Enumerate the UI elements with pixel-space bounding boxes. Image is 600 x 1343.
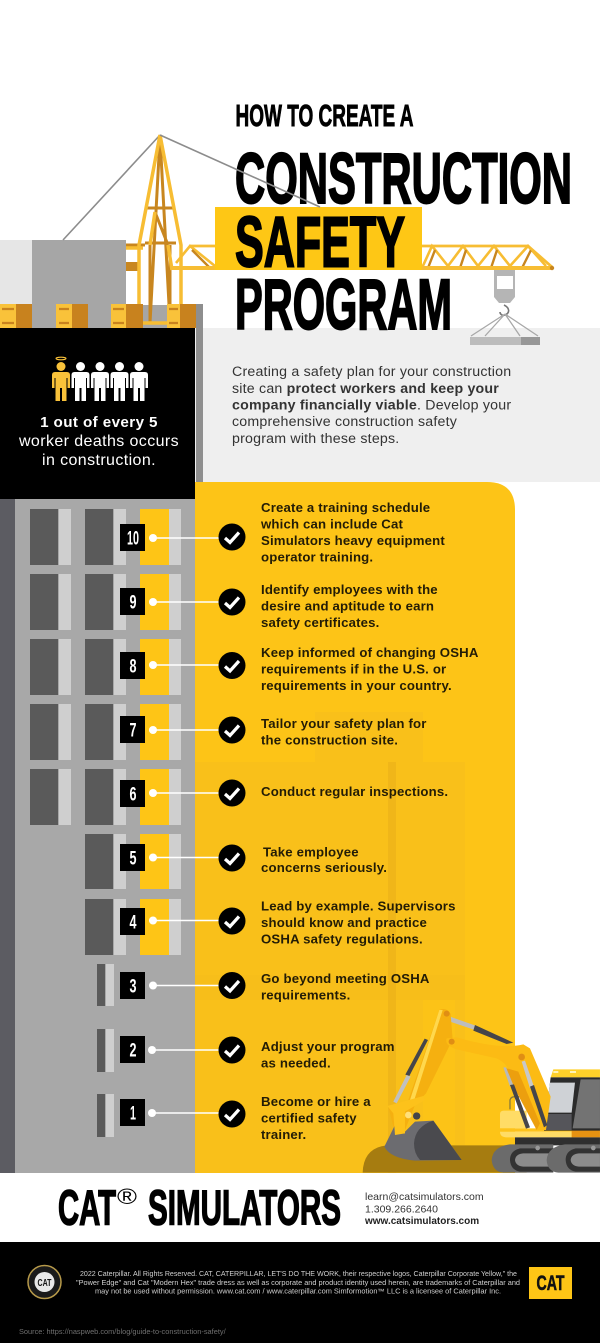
step 7 <box>120 716 427 748</box>
icon: check <box>218 972 246 999</box>
step 8 text <box>261 645 479 693</box>
intro text <box>232 364 511 447</box>
step 7 text <box>261 716 427 748</box>
icon: check <box>218 1036 246 1064</box>
step 3 <box>120 971 430 1002</box>
brand logo text: CAT <box>58 1182 116 1236</box>
legal text: may not be used without permission. www.cat.com / www.caterpillar.com Simformotion™ LLC is a licensee of Caterpillar Inc. <box>95 1288 501 1296</box>
number badge 8: 8 <box>130 656 137 678</box>
step 3 text: Go beyond meeting OSHA <box>261 971 430 986</box>
number badge 1: 1 <box>130 1102 136 1124</box>
contact details: 1.309.266.2640 <box>365 1204 438 1216</box>
step 8 <box>120 645 479 693</box>
heading line: safety: SAFETY <box>235 204 405 282</box>
step 8 text: Keep informed of changing OSHA <box>261 645 479 660</box>
panel: worker deaths statistic <box>0 328 195 499</box>
intro text: site can protect workers and keep your <box>232 381 499 397</box>
number badge 4 <box>120 908 145 935</box>
step 10 text: Create a training schedule <box>261 500 430 515</box>
highlight behind word safety <box>215 207 422 270</box>
cat logo box: CAT <box>536 1272 565 1295</box>
excavator tracks <box>492 1144 553 1173</box>
step 9 text: safety certificates. <box>261 615 380 630</box>
step 2 text: as needed. <box>261 1056 331 1070</box>
icon: five workers, one with halo <box>52 357 148 401</box>
step 1 text <box>261 1094 371 1142</box>
icon: check <box>218 716 246 744</box>
number badge 2 <box>120 1036 145 1063</box>
step 10 text <box>260 500 445 564</box>
step 9 text: desire and aptitude to earn <box>261 598 434 614</box>
number badge 6: 6 <box>130 784 137 806</box>
number badge 4: 4 <box>130 912 137 934</box>
brand logo text: ® <box>117 1184 137 1209</box>
heading line: program: PROGRAM <box>235 266 452 345</box>
background band: light gray intro panel <box>195 328 600 482</box>
excavator rear counterweight <box>500 1111 527 1128</box>
heading line: how to create a: HOW TO CREATE A <box>236 98 414 133</box>
cat logo box <box>529 1267 572 1299</box>
step 3 text: requirements. <box>261 988 350 1002</box>
step 4 text <box>261 898 456 946</box>
statistic text <box>18 414 179 469</box>
step 2 <box>120 1036 395 1070</box>
step 9 text: Identify employees with the <box>261 582 438 597</box>
statistic text: worker deaths occurs <box>18 433 179 450</box>
icon: check <box>218 524 246 550</box>
icon: check <box>218 780 246 806</box>
excavator bucket <box>384 1121 462 1161</box>
number badge 3 <box>120 972 145 999</box>
icon: check <box>218 652 246 679</box>
step 9 text <box>261 582 438 630</box>
step 10 <box>120 500 445 564</box>
step 4 text: Lead by example. Supervisors <box>261 898 456 914</box>
source line: Source: https://naspweb.com/blog/guide-to-construction-safety/ <box>19 1327 227 1336</box>
step 5 text: concerns seriously. <box>261 860 387 875</box>
title block <box>215 98 572 345</box>
ground mound <box>363 1145 527 1173</box>
number badge 9 <box>120 588 145 615</box>
brand logo text <box>58 1182 341 1236</box>
number badge 7 <box>120 716 145 743</box>
intro text: company financially viable. Develop your <box>232 398 511 414</box>
step 10 text: which can include Cat <box>260 516 404 532</box>
step 8 text: requirements if in the U.S. or <box>261 662 446 676</box>
step 10 text: Simulators heavy equipment <box>261 533 445 548</box>
panel: yellow steps background <box>195 482 515 1173</box>
legal text: "Power Edge" and Cat "Modern Hex" trade dress as well as corporate and product identity used herein, are trademarks of Caterpillar and <box>76 1280 520 1287</box>
crane and rooftop illustration <box>0 135 554 482</box>
step 8 text: requirements in your country. <box>261 678 452 693</box>
statistic text: 1 out of every 5 <box>40 414 158 431</box>
step 4 text: should know and practice <box>261 915 427 930</box>
step 6 <box>120 780 448 807</box>
step 9 <box>120 582 438 630</box>
step 10 text: operator training. <box>261 550 373 564</box>
step 7 text: Tailor your safety plan for <box>261 716 427 731</box>
building <box>0 499 195 1173</box>
icon: check <box>218 844 246 872</box>
number badge 5: 5 <box>130 848 137 870</box>
number badge 6 <box>120 780 145 807</box>
number badge 7: 7 <box>130 720 136 742</box>
number badge 8 <box>120 652 145 679</box>
excavator <box>363 1009 600 1173</box>
brand logo text: SIMULATORS <box>148 1182 341 1236</box>
icon: check <box>218 1100 246 1128</box>
step 4 <box>120 898 456 946</box>
icon: check <box>218 588 246 616</box>
hook and suspended load <box>470 270 540 345</box>
step 5 text: Take employee <box>263 844 359 860</box>
step 1 text: Become or hire a <box>261 1094 371 1109</box>
crane jib truss <box>172 246 554 270</box>
excavator cab <box>551 1069 600 1077</box>
number badge 9: 9 <box>130 592 137 614</box>
contact details <box>364 1191 484 1227</box>
step 3 text <box>261 971 430 1002</box>
step 1 text: certified safety <box>261 1110 357 1126</box>
excavator arm and hydraulics <box>450 1017 477 1030</box>
legal text <box>76 1271 520 1296</box>
contact details: learn@catsimulators.com <box>365 1191 484 1203</box>
number badge 3: 3 <box>130 976 137 998</box>
intro text: program with these steps. <box>232 431 399 447</box>
stacked rooftop crates <box>0 304 196 328</box>
step 1 text: trainer. <box>261 1127 306 1142</box>
footer black band <box>0 1242 600 1343</box>
step 7 text: the construction site. <box>261 732 398 748</box>
intro text: Creating a safety plan for your construction <box>232 364 511 380</box>
legal text: 2022 Caterpillar. All Rights Reserved. CAT, CATERPILLAR, LET'S DO THE WORK, their respective logos, Caterpillar Corporate Yellow," the <box>80 1271 517 1278</box>
step 5 text <box>261 844 387 875</box>
step 1 <box>120 1094 371 1142</box>
step 2 text <box>261 1039 395 1070</box>
number badge 2: 2 <box>130 1040 137 1062</box>
number badge 10 <box>120 524 145 551</box>
step 5 <box>120 844 387 875</box>
step 6 text: Conduct regular inspections. <box>261 784 448 799</box>
number badge 5 <box>120 844 145 871</box>
statistic text: in construction. <box>42 452 156 469</box>
intro text: comprehensive construction safety <box>232 414 458 430</box>
step 4 text: OSHA safety regulations. <box>261 932 423 946</box>
number badge 1 <box>120 1099 145 1126</box>
icon: check <box>218 908 246 934</box>
step 2 text: Adjust your program <box>261 1039 395 1054</box>
seal logo: CAT <box>38 1278 52 1289</box>
seal logo <box>28 1266 61 1298</box>
number badge 10: 10 <box>127 528 139 550</box>
contact details: www.catsimulators.com <box>364 1216 479 1227</box>
